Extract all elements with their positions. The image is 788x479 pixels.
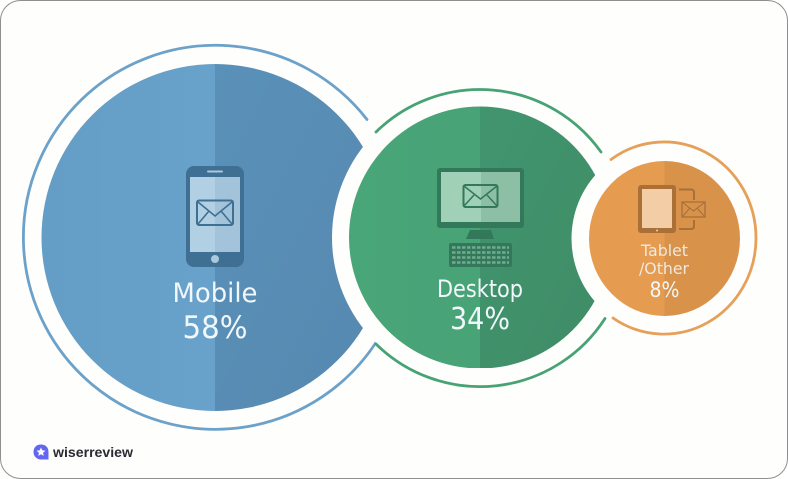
label: Mobile 58%: 58%	[182, 310, 248, 346]
desktop disc	[349, 106, 611, 368]
circle: desktop	[332, 90, 628, 387]
label: Desktop 34%	[437, 275, 523, 337]
label: Mobile 58%: Mobile	[172, 278, 258, 309]
label: Tablet /Other 8%: Tablet	[640, 241, 688, 260]
logo icon	[34, 444, 48, 460]
desktop outer ring	[376, 90, 605, 387]
logo wordmark: wiserreview	[52, 445, 134, 460]
icon: smartphone with envelope	[186, 166, 244, 267]
mobile disc	[41, 64, 389, 412]
label: Tablet /Other 8%: 8%	[650, 278, 680, 302]
mobile outer ring	[23, 45, 376, 429]
circle: tablet/other	[572, 142, 758, 334]
tablet disc	[589, 161, 740, 317]
label: Tablet /Other 8%	[639, 241, 689, 302]
tablet white halo	[572, 144, 758, 334]
icon: tablet with envelope	[638, 185, 705, 233]
tablet outer ring	[611, 142, 756, 334]
label: Desktop 34%: 34%	[450, 302, 510, 337]
circle: mobile	[23, 45, 389, 429]
logo: wiserreview	[34, 444, 134, 460]
desktop white halo	[332, 90, 628, 386]
label: Mobile 58%	[172, 278, 258, 346]
icon: desktop monitor and keyboard	[437, 168, 524, 267]
label: Tablet /Other 8%: /Other	[639, 259, 689, 278]
label: Desktop 34%: Desktop	[437, 275, 523, 303]
